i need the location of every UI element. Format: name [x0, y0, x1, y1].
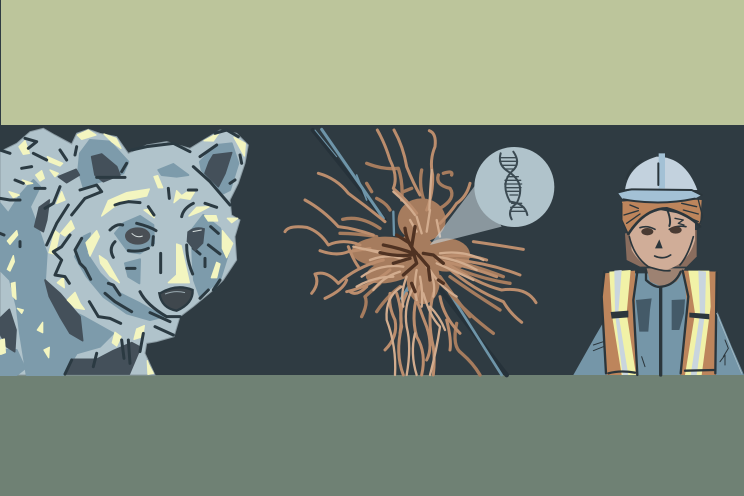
- safety vest right: [681, 271, 717, 375]
- bottom band: [0, 375, 744, 496]
- darker hair strands: [340, 163, 510, 375]
- jacket details: [593, 271, 742, 375]
- hair behind face: [625, 230, 697, 267]
- pale hair strands: [353, 170, 483, 375]
- face: [629, 210, 695, 271]
- bear ink lines: [0, 130, 242, 374]
- main hair strands: [285, 130, 536, 375]
- jacket: [573, 273, 744, 375]
- illustration: bear: [0, 128, 248, 375]
- eyes and nose: [641, 226, 682, 248]
- bear cream highlights: [1, 130, 245, 374]
- barbed wire strands: [313, 129, 507, 375]
- illustration: field worker: [573, 153, 744, 375]
- headband: [622, 198, 702, 234]
- hair root core: [380, 227, 443, 292]
- bear dark fur patches: [0, 153, 232, 374]
- icon: DNA helix: [500, 152, 527, 219]
- bear head and body silhouette: [0, 128, 248, 375]
- bear eyes and nose: [125, 227, 205, 311]
- bear mid-tone fur: [0, 140, 238, 375]
- DNA magnifier circle: [474, 147, 554, 227]
- hair follicle mass: [352, 198, 470, 304]
- magnifier beam: [430, 183, 502, 245]
- safety vest left: [602, 270, 637, 375]
- face and hair lines: [622, 200, 703, 271]
- top band: [1, 0, 744, 125]
- illustration: hair sample with roots on barbed wire: [285, 129, 554, 375]
- hard hat: [618, 153, 702, 203]
- neck: [647, 268, 685, 287]
